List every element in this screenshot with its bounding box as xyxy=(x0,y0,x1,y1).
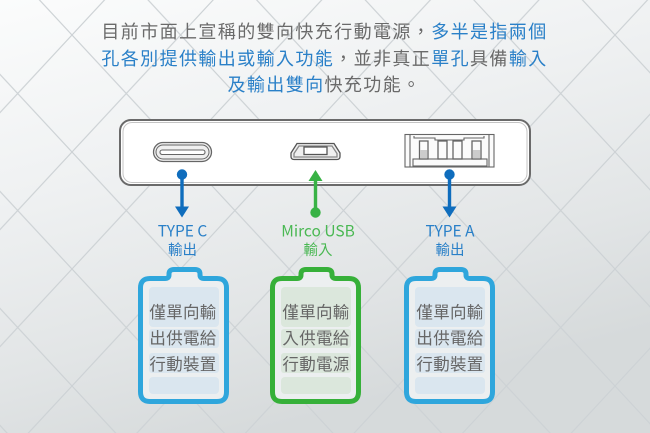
battery: Type A output only: 僅單向輸 xyxy=(416,299,484,323)
title text xyxy=(101,18,548,97)
label: Type A xyxy=(425,220,475,260)
label: Type A: 輸出 xyxy=(436,239,464,260)
arrow: Micro USB input xyxy=(308,170,322,218)
power bank body xyxy=(120,120,530,185)
battery: Type C output only: 出供電給 xyxy=(149,325,217,349)
battery: Micro USB input only xyxy=(272,270,358,402)
icon: Type A port xyxy=(405,134,494,167)
label: Type A: TYPE A xyxy=(425,220,475,242)
label: Type C: 輸出 xyxy=(168,239,197,260)
arrow: Type C output xyxy=(175,169,189,218)
icon: Micro USB port xyxy=(291,144,340,160)
title text: 目前市面上宣稱的雙向快充行動電源，多半是指兩個 xyxy=(101,18,548,44)
battery: Type A output only xyxy=(406,270,492,402)
icon: Type C port xyxy=(154,142,212,162)
label: Type C: TYPE C xyxy=(158,220,207,242)
title text: 及輸出雙向快充功能。 xyxy=(228,71,422,97)
battery: Type C output only: 行動裝置 xyxy=(149,351,217,375)
battery: Type C output only: 僅單向輸 xyxy=(149,299,217,323)
arrow: Type A output xyxy=(442,169,456,218)
battery: Micro USB input only: 僅單向輸 xyxy=(282,299,350,323)
battery: Micro USB input only: 行動電源 xyxy=(282,351,350,375)
battery: Type C output only xyxy=(140,270,226,402)
label: Micro USB: 輸入 xyxy=(304,239,333,260)
battery: Type A output only: 行動裝置 xyxy=(416,351,484,375)
battery: Micro USB input only: 入供電給 xyxy=(282,325,350,349)
label: Micro USB xyxy=(281,220,355,260)
title text: 孔各別提供輸出或輸入功能，並非真正單孔具備輸入 xyxy=(101,45,548,71)
label: Micro USB: Mirco USB xyxy=(281,220,355,242)
battery: Type A output only: 出供電給 xyxy=(416,325,484,349)
label: Type C xyxy=(158,220,207,260)
